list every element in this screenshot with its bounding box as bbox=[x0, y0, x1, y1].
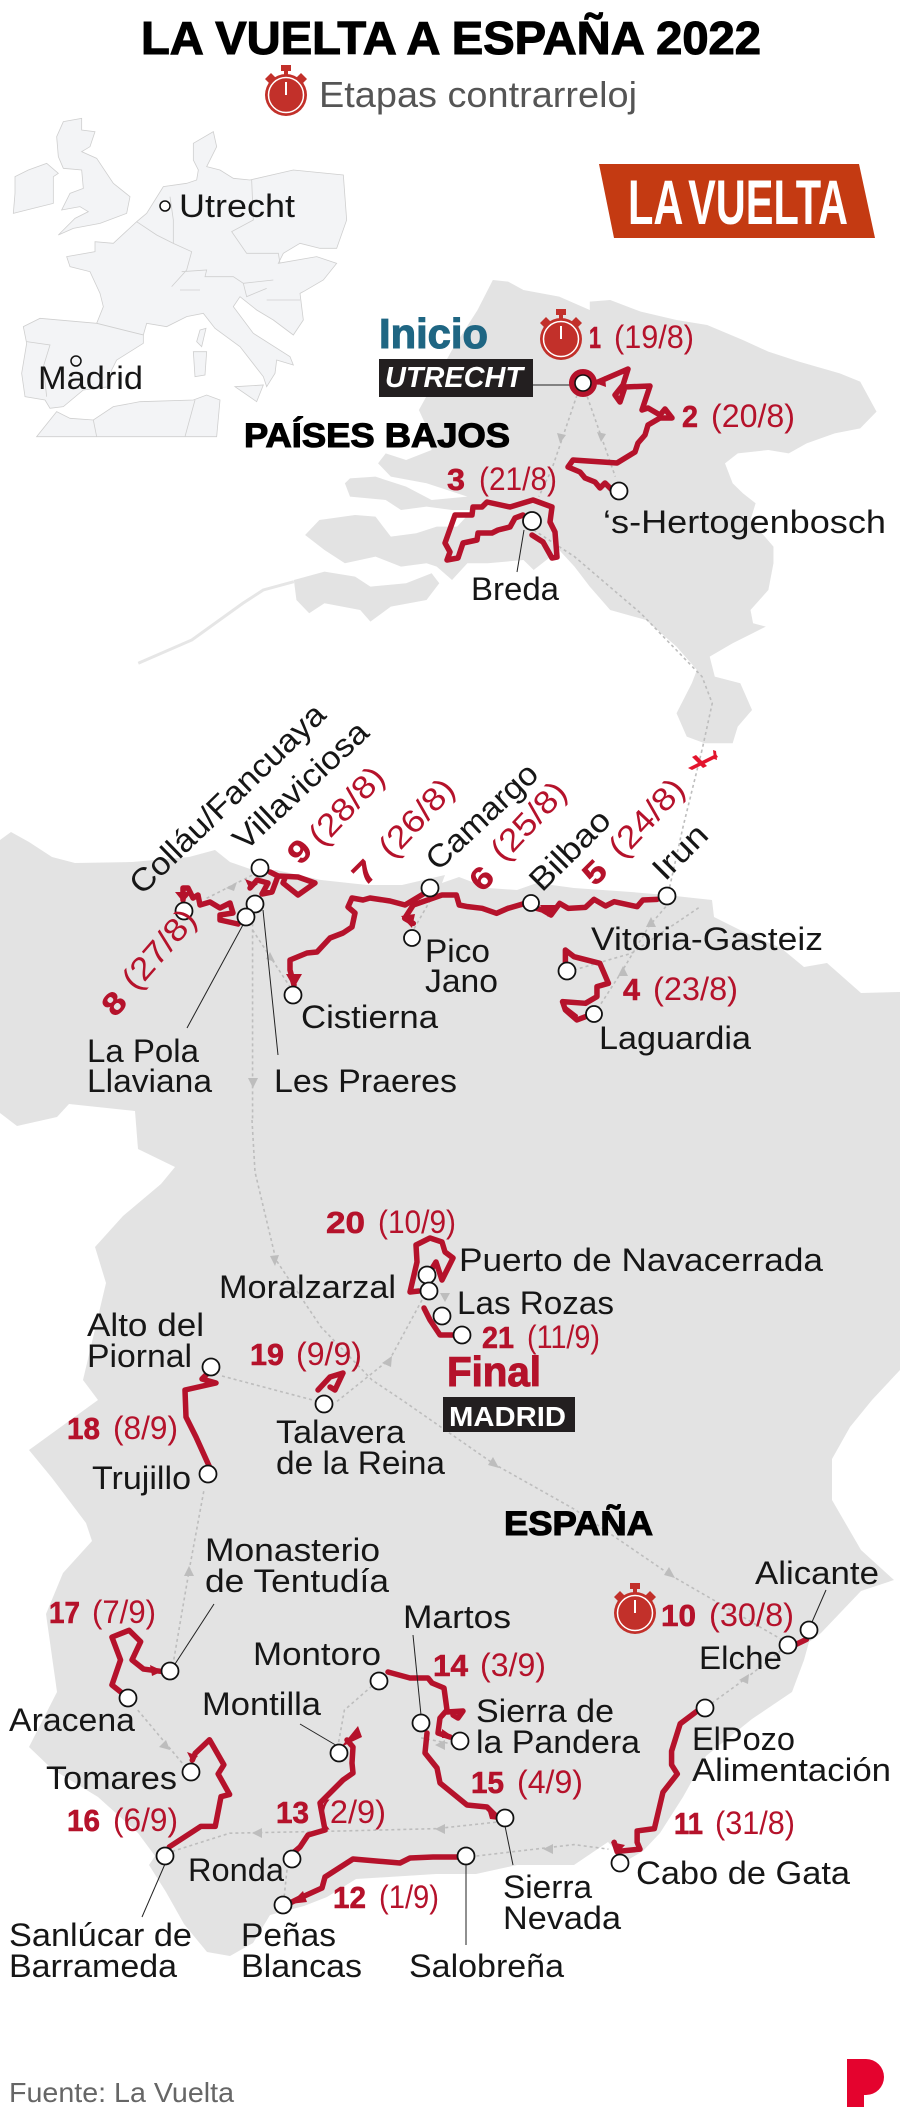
city labels: north Spain: Vitoria-Gasteiz bbox=[591, 921, 823, 957]
stage label 12: (1/9) bbox=[379, 1879, 439, 1915]
city labels: central Spain: Talavera bbox=[276, 1414, 405, 1450]
rotated stage label 5: 5 bbox=[575, 853, 614, 892]
country label: España: ESPAÑA bbox=[504, 1505, 653, 1543]
city labels: north Spain: Laguardia bbox=[599, 1020, 751, 1056]
stage label 14 bbox=[433, 1647, 546, 1683]
city labels: south Spain: de Tentudía bbox=[205, 1563, 389, 1599]
city labels: south Spain: Tomares bbox=[46, 1760, 177, 1796]
map: Netherlands land bbox=[138, 280, 877, 743]
leader lines bbox=[142, 385, 826, 1945]
label box: Utrecht: UTRECHT bbox=[385, 362, 525, 394]
stage label 20: (10/9) bbox=[378, 1204, 456, 1240]
stage label 12 bbox=[333, 1879, 439, 1915]
rotated city labels: Irun bbox=[644, 816, 715, 887]
routes: stages 4 to 6 bbox=[405, 895, 657, 1020]
stage label 1: (19/8) bbox=[614, 319, 694, 355]
label box: Madrid: MADRID bbox=[449, 1401, 566, 1432]
routes: stages 10 to 17 bbox=[112, 1630, 806, 1903]
city labels: south Spain: Elche bbox=[699, 1640, 782, 1676]
stage label 21: 21 bbox=[482, 1320, 514, 1355]
stage label 20 bbox=[326, 1204, 456, 1240]
city labels: central Spain: Piornal bbox=[87, 1338, 192, 1374]
inset labels: Madrid: Madrid bbox=[38, 360, 143, 396]
city labels: south Spain: Salobreña bbox=[409, 1948, 564, 1984]
city labels: Netherlands: Breda bbox=[471, 571, 559, 607]
stage label 17: (7/9) bbox=[92, 1594, 156, 1630]
rotated stage label 7 bbox=[345, 771, 462, 892]
inset map: Europe bbox=[13, 118, 347, 437]
start marker: Utrecht bbox=[572, 372, 594, 394]
stage label 2: (20/8) bbox=[711, 398, 795, 434]
inset labels: Utrecht: Utrecht bbox=[179, 188, 295, 224]
heading: Final: Final bbox=[447, 1348, 541, 1395]
rotated stage label 6: (25/8) bbox=[483, 774, 574, 868]
stage label 15: (4/9) bbox=[517, 1764, 583, 1800]
city labels: Netherlands bbox=[471, 504, 886, 607]
stage label 13: (2/9) bbox=[319, 1794, 386, 1830]
stage label 13 bbox=[276, 1794, 386, 1830]
city labels: central Spain: Alto del bbox=[87, 1307, 204, 1343]
stage label 4: (23/8) bbox=[653, 971, 738, 1007]
rotated stage label 9 bbox=[280, 759, 392, 871]
stage label 11 bbox=[674, 1805, 795, 1841]
stage label 17: 17 bbox=[49, 1595, 80, 1630]
city labels: south Spain: Monasterio bbox=[205, 1532, 380, 1568]
city labels: north Spain bbox=[87, 921, 823, 1099]
stage end points bbox=[120, 482, 818, 1914]
city labels: south Spain: Blancas bbox=[241, 1948, 362, 1984]
icon: plane bbox=[688, 750, 718, 770]
stage label 16 bbox=[67, 1802, 178, 1838]
stage label 21 bbox=[482, 1319, 600, 1355]
routes: stages 7 to 9 bbox=[183, 872, 425, 985]
stage label 14: 14 bbox=[433, 1648, 469, 1683]
stage label 14: (3/9) bbox=[480, 1647, 546, 1683]
stage label 10: (30/8) bbox=[709, 1597, 794, 1633]
icon: stopwatch stage 10 bbox=[614, 1583, 656, 1634]
stage label 18: (8/9) bbox=[113, 1410, 178, 1446]
city labels: Netherlands: ‘s-Hertogenbosch bbox=[603, 504, 886, 540]
stage label 4: 4 bbox=[623, 972, 641, 1007]
country label: Países Bajos: PAÍSES BAJOS bbox=[244, 417, 510, 455]
city labels: south Spain: Aracena bbox=[9, 1702, 135, 1738]
stage label 1: 1 bbox=[589, 320, 601, 355]
stage label 21: (11/9) bbox=[527, 1319, 600, 1355]
city labels: central Spain: Las Rozas bbox=[457, 1285, 614, 1321]
stage label 3 bbox=[447, 461, 557, 497]
rotated stage label 6 bbox=[462, 774, 574, 898]
stage label 15: 15 bbox=[471, 1765, 504, 1800]
rotated city labels: Colláu/Fancuaya bbox=[122, 696, 333, 901]
rotated city labels: Bilbao bbox=[521, 802, 618, 898]
stage label 15 bbox=[471, 1764, 583, 1800]
city labels: south Spain: ElPozo bbox=[692, 1721, 795, 1757]
city labels: south Spain: Alicante bbox=[755, 1555, 879, 1591]
stage label 11: (31/8) bbox=[715, 1805, 795, 1841]
city labels: north Spain: Llaviana bbox=[87, 1063, 212, 1099]
rotated city labels bbox=[122, 696, 715, 901]
city labels: central Spain: Puerto de Navacerrada bbox=[459, 1242, 823, 1278]
stage label 12: 12 bbox=[333, 1880, 366, 1915]
icon: stopwatch legend bbox=[265, 65, 307, 116]
stage label 11: 11 bbox=[674, 1806, 703, 1841]
rotated stage label 7: 7 bbox=[345, 853, 384, 892]
city labels: south Spain: Sierra de bbox=[476, 1693, 614, 1729]
city labels: south Spain: Montoro bbox=[253, 1636, 381, 1672]
rotated stage label 8: (27/8) bbox=[114, 901, 204, 997]
stage label 3: 3 bbox=[447, 462, 465, 497]
city labels: south Spain: Montilla bbox=[202, 1686, 321, 1722]
stage label 16: 16 bbox=[67, 1803, 100, 1838]
city labels: south Spain bbox=[9, 1532, 891, 1984]
rotated stage label 8 bbox=[95, 901, 204, 1023]
city labels: north Spain: La Pola bbox=[87, 1033, 199, 1069]
city labels: central Spain: Trujillo bbox=[92, 1460, 191, 1496]
transfer lines bbox=[138, 395, 786, 1897]
logo: publisher P bbox=[847, 2059, 884, 2107]
rotated stage label 5 bbox=[575, 771, 692, 892]
city labels: south Spain: Alimentación bbox=[692, 1752, 891, 1788]
city labels: central Spain bbox=[87, 1242, 823, 1496]
stage label 19 bbox=[250, 1336, 362, 1372]
stage label 19: (9/9) bbox=[296, 1336, 362, 1372]
stage label 18: 18 bbox=[67, 1411, 100, 1446]
source: Fuente: La Vuelta bbox=[9, 2077, 234, 2108]
stage label 18 bbox=[67, 1410, 178, 1446]
city labels: south Spain: Martos bbox=[403, 1599, 511, 1635]
rotated city labels: Camargo bbox=[418, 755, 545, 877]
stage label 17 bbox=[49, 1594, 156, 1630]
rotated stage label 7: (26/8) bbox=[371, 771, 462, 865]
stage label 10: 10 bbox=[661, 1598, 696, 1633]
rotated stage label 8: 8 bbox=[95, 984, 134, 1023]
city labels: south Spain: Barrameda bbox=[9, 1948, 177, 1984]
subtitle: Etapas contrarreloj bbox=[319, 74, 637, 115]
city labels: central Spain: de la Reina bbox=[276, 1445, 445, 1481]
city labels: north Spain: Les Praeres bbox=[274, 1063, 457, 1099]
city labels: south Spain: la Pandera bbox=[476, 1724, 640, 1760]
city labels: south Spain: Peñas bbox=[241, 1917, 336, 1953]
city labels: north Spain: Pico bbox=[425, 933, 490, 969]
routes: stages 1 to 3 bbox=[445, 369, 672, 560]
rotated stage label 6: 6 bbox=[462, 859, 501, 898]
city labels: south Spain: Ronda bbox=[188, 1852, 284, 1888]
stage label 3: (21/8) bbox=[479, 461, 557, 497]
rotated city labels: Villaviciosa bbox=[225, 713, 376, 857]
icon: stopwatch stage 1 bbox=[540, 309, 582, 360]
city labels: south Spain: Cabo de Gata bbox=[636, 1855, 850, 1891]
routes: stages 18 to 21 bbox=[185, 1238, 455, 1468]
city labels: central Spain: Moralzarzal bbox=[219, 1269, 396, 1305]
map: Spain land bbox=[0, 832, 900, 1956]
heading: Inicio: Inicio bbox=[379, 310, 488, 357]
title: LA VUELTA A ESPAÑA 2022 bbox=[141, 12, 761, 64]
city labels: south Spain: Sanlúcar de bbox=[9, 1917, 192, 1953]
stage label 16: (6/9) bbox=[113, 1802, 178, 1838]
transfer arrowheads bbox=[159, 432, 749, 1854]
stage label 20: 20 bbox=[326, 1205, 365, 1240]
rotated stage label 9: (28/8) bbox=[301, 759, 392, 853]
route arrowheads bbox=[150, 376, 625, 1904]
stage label 13: 13 bbox=[276, 1795, 309, 1830]
city labels: north Spain: Jano bbox=[425, 963, 498, 999]
stage label 19: 19 bbox=[250, 1337, 284, 1372]
rotated stage label 9: 9 bbox=[280, 832, 319, 871]
city labels: south Spain: Nevada bbox=[503, 1900, 621, 1936]
city labels: north Spain: Cistierna bbox=[301, 999, 438, 1035]
stage label 10 bbox=[661, 1597, 794, 1633]
stage label 2: 2 bbox=[682, 399, 698, 434]
city labels: south Spain: Sierra bbox=[503, 1869, 592, 1905]
rotated stage label 5: (24/8) bbox=[601, 771, 692, 865]
